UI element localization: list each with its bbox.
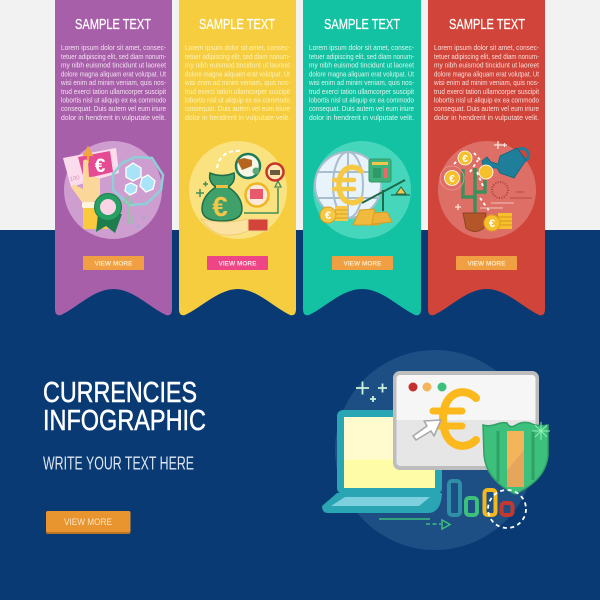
title xyxy=(43,377,206,437)
text block: yellow panel: consequat. Duis autem vel eum iriure xyxy=(185,104,290,113)
page background: navy bottom xyxy=(0,230,600,600)
text block: purple panel: trud exerci tation ullamcorper suscipit xyxy=(61,87,166,96)
text block: yellow panel: dolore magna aliquam erat volutpat. Ut xyxy=(185,69,290,78)
text block: red panel: dolore magna aliquam erat volutpat. Ut xyxy=(434,69,539,78)
icon: browser window with euro xyxy=(393,371,539,470)
button: purple panel xyxy=(83,256,144,270)
text block: red panel: dolor in hendrerit in vulputate velit. xyxy=(434,113,539,122)
text block: purple panel: lobortis nisl ut aliquip ex ea commodo xyxy=(61,96,166,104)
text block: yellow panel: Lorem ipsum dolor sit amet, consec- xyxy=(185,43,290,52)
text block: red panel xyxy=(433,43,539,122)
title: CURRENCIES xyxy=(43,377,197,409)
text block: red panel: wisi enim ad minim veniam, quis nos- xyxy=(433,78,539,87)
text block: purple panel: dolore magna aliquam erat volutpat. Ut xyxy=(61,69,166,78)
heading: purple panel: SAMPLE TEXT xyxy=(75,16,151,33)
text block: teal panel: consequat. Duis autem vel eum iriure xyxy=(309,104,414,113)
icon: hand, banknote, gems and rosette: × xyxy=(136,224,140,231)
icon: shield xyxy=(483,422,550,494)
text block: yellow panel: lobortis nisl ut aliquip ex ea commodo xyxy=(185,96,290,104)
button: yellow panel: VIEW MORE xyxy=(219,260,257,268)
text block: purple panel: Lorem ipsum dolor sit amet, consec- xyxy=(61,43,166,52)
text block: yellow panel: my nibh euismod tincidunt ut laoreet xyxy=(185,61,290,70)
page background: light top xyxy=(0,0,600,230)
button: teal panel: VIEW MORE xyxy=(344,260,382,268)
icon: hand, banknote, gems and rosette: 100 xyxy=(69,175,81,183)
heading: red panel: SAMPLE TEXT xyxy=(449,16,525,33)
text block: teal panel: tetuer adipiscing elit, sed diam nonum- xyxy=(309,52,414,61)
icon: globe, euro, calculator, gold and scale xyxy=(313,141,411,239)
text block: teal panel: lobortis nisl ut aliquip ex ea commodo xyxy=(309,96,414,104)
button: teal panel xyxy=(332,256,393,270)
text block: red panel: trud exerci tation ullamcorper suscipit xyxy=(434,87,539,96)
panel: red xyxy=(428,0,545,315)
button: red panel: VIEW MORE xyxy=(468,260,506,268)
text block: red panel: Lorem ipsum dolor sit amet, consec- xyxy=(434,43,539,52)
heading: yellow panel: SAMPLE TEXT xyxy=(199,16,275,33)
text block: yellow panel xyxy=(184,43,290,122)
icon: money plant and watering can: € xyxy=(449,174,455,185)
text block: teal panel xyxy=(308,43,414,122)
text block: red panel: tetuer adipiscing elit, sed diam nonum- xyxy=(434,52,539,61)
subtitle: WRITE YOUR TEXT HERE xyxy=(43,454,194,474)
icon: hand, banknote, gems and rosette: € xyxy=(95,156,106,177)
text block: teal panel: Lorem ipsum dolor sit amet, consec- xyxy=(309,43,414,52)
button: red panel xyxy=(456,256,517,270)
panel: yellow xyxy=(179,0,296,315)
icon: globe, euro, calculator, gold and scale: € xyxy=(325,210,331,222)
heading: teal panel: SAMPLE TEXT xyxy=(324,16,400,33)
button: main view more xyxy=(46,511,130,534)
icon: money plant and watering can: € xyxy=(462,154,468,165)
button: main view more: VIEW MORE xyxy=(64,517,112,527)
bar chart icons xyxy=(449,481,526,528)
text block: teal panel: dolor in hendrerit in vulputate velit. xyxy=(309,113,414,122)
panel: purple xyxy=(55,0,172,315)
icon: watering can xyxy=(482,148,528,178)
text block: red panel: my nibh euismod tincidunt ut laoreet xyxy=(434,61,539,70)
icon: plus signs xyxy=(356,382,387,402)
icon: hand, banknote, gems and rosette xyxy=(63,141,163,239)
text block: purple panel: consequat. Duis autem vel eum iriure xyxy=(61,104,166,113)
text block: yellow panel: tetuer adipiscing elit, sed diam nonum- xyxy=(185,52,290,61)
text block: yellow panel: dolor in hendrerit in vulputate velit. xyxy=(185,113,290,122)
text block: red panel: consequat. Duis autem vel eum iriure xyxy=(434,104,539,113)
icon: hand, banknote, gems and rosette: × xyxy=(142,215,146,222)
text block: purple panel: dolor in hendrerit in vulputate velit. xyxy=(61,113,166,122)
icon: money bag on hand with shopping circles xyxy=(189,141,287,239)
illustration: laptop, euro window, shield and charts xyxy=(322,350,550,550)
icon: laptop xyxy=(322,410,442,513)
text block: yellow panel: trud exerci tation ullamcorper suscipit xyxy=(185,87,290,96)
text block: red panel: lobortis nisl ut aliquip ex ea commodo xyxy=(434,96,539,104)
text block: teal panel: dolore magna aliquam erat volutpat. Ut xyxy=(309,69,414,78)
text block: teal panel: my nibh euismod tincidunt ut laoreet xyxy=(309,61,414,70)
text block: purple panel: my nibh euismod tincidunt ut laoreet xyxy=(61,61,166,70)
arrow xyxy=(379,519,450,529)
button: purple panel: VIEW MORE xyxy=(95,260,133,268)
text block: purple panel xyxy=(60,43,166,122)
icon: money plant and watering can xyxy=(438,141,536,239)
text block: purple panel: tetuer adipiscing elit, sed diam nonum- xyxy=(61,52,166,61)
text block: teal panel: wisi enim ad minim veniam, quis nos- xyxy=(308,78,414,87)
icon: money bag on hand with shopping circles: € xyxy=(212,191,228,222)
text block: teal panel: trud exerci tation ullamcorper suscipit xyxy=(309,87,414,96)
panel: teal xyxy=(303,0,421,315)
title: INFOGRAPHIC xyxy=(43,405,206,437)
button: yellow panel xyxy=(207,256,268,270)
text block: yellow panel: wisi enim ad minim veniam, quis nos- xyxy=(184,78,290,87)
text block: purple panel: wisi enim ad minim veniam, quis nos- xyxy=(60,78,166,87)
icon: money plant and watering can: € xyxy=(489,218,495,230)
